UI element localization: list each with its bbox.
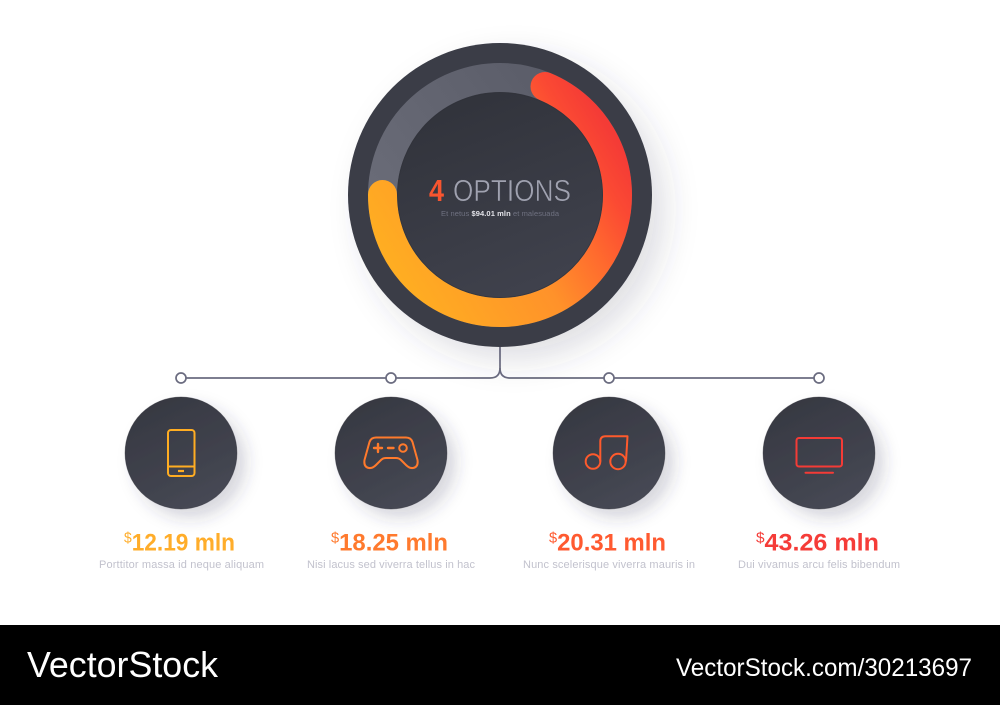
icon: music note xyxy=(586,436,628,469)
icon: gamepad xyxy=(364,438,418,468)
icon: television xyxy=(796,438,842,473)
value: 43.26 mln xyxy=(765,530,879,556)
description: Dui vivamus arcu felis bibendum xyxy=(738,559,900,571)
value: 20.31 mln xyxy=(557,530,666,556)
button xyxy=(125,397,237,509)
value: $ xyxy=(124,530,132,546)
node: option 1 xyxy=(176,373,186,383)
value: $ xyxy=(756,530,765,546)
subtitle: Et netus $94.01 mln et malesuada xyxy=(441,209,560,218)
watermark url: VectorStock.com/30213697 xyxy=(676,654,972,682)
description: Nunc scelerisque viverra mauris in xyxy=(523,559,695,571)
heading word: OPTIONS xyxy=(453,173,571,208)
value: $ xyxy=(549,530,558,546)
node: option 4 xyxy=(814,373,824,383)
footer bar xyxy=(0,625,1000,705)
option 1: mobile xyxy=(99,397,264,571)
node: option 3 xyxy=(604,373,614,383)
button xyxy=(335,397,447,509)
value: 12.19 mln xyxy=(132,530,235,556)
node: option 2 xyxy=(386,373,396,383)
value: $ xyxy=(331,530,340,546)
button xyxy=(763,397,875,509)
icon: smartphone xyxy=(168,430,194,476)
heading number: 4 xyxy=(429,174,444,208)
option 4: tv xyxy=(738,397,900,571)
grey ring track xyxy=(382,78,618,312)
donut chart xyxy=(348,43,652,347)
option 2: games xyxy=(307,397,476,571)
orange to red progress arc xyxy=(382,86,617,313)
watermark logo: VectorStock xyxy=(27,644,219,685)
description: Nisi lacus sed viverra tellus in hac xyxy=(307,559,476,571)
option 3: music xyxy=(523,397,695,571)
description: Porttitor massa id neque aliquam xyxy=(99,559,264,571)
connector lines xyxy=(176,346,824,383)
button xyxy=(553,397,665,509)
inner disc xyxy=(398,92,602,298)
outer dial disc xyxy=(348,43,652,347)
value: 18.25 mln xyxy=(339,530,448,556)
